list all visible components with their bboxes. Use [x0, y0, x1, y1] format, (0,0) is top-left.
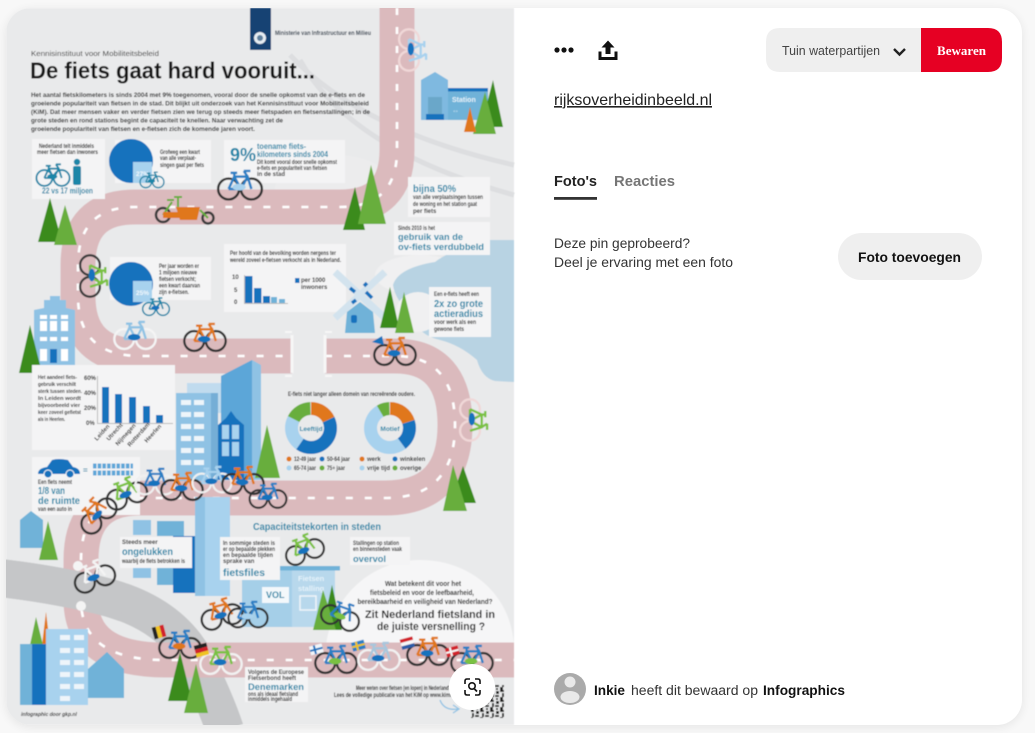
trees by windmill	[380, 287, 414, 333]
bike: top road	[399, 29, 426, 71]
fietsenstalling building: stalling	[298, 584, 325, 593]
bar chart: aandeel fietsgebruik: Utrecht	[106, 423, 125, 442]
bar chart: per 1000 inwoners	[232, 275, 328, 306]
button: foto toevoegen: Foto toevoegen	[858, 250, 961, 265]
intro paragraph: Het aantal fietskilometers is sinds 2004 met 9% toegenomen, vooral door de snelle opkomst van de e-fiets en de	[31, 93, 366, 99]
panel: ov-fiets	[394, 222, 490, 255]
panel: auto ruimte	[32, 457, 140, 515]
trees at station	[464, 80, 503, 134]
donut legends: 75+ jaar	[327, 466, 346, 472]
panel: ongelukken	[120, 537, 192, 568]
panel: kwart verplaatsingen: Grofweg een kwart	[160, 150, 200, 156]
bar chart: aandeel fietsgebruik	[84, 376, 173, 448]
saved by: heeft dit bewaard op	[631, 683, 758, 698]
bike: orange right	[374, 338, 416, 365]
panel: 9 procent: in de stad	[257, 172, 285, 178]
toolbar	[554, 28, 1002, 72]
question text	[358, 579, 495, 633]
station: ⇔	[452, 108, 459, 115]
fietsenstalling building: Fietsen	[298, 574, 325, 583]
panel: denemarken: inmiddels ingehaald	[248, 697, 292, 703]
question text: Wat betekent dit voor het	[385, 579, 462, 588]
trees top left	[38, 198, 77, 245]
bike: white wheels	[114, 322, 156, 349]
panel: actieradius: gewone fiets	[434, 327, 465, 333]
donut legends: 65-74 jaar	[294, 466, 317, 472]
tree left	[19, 325, 42, 373]
tree centre	[255, 425, 280, 478]
fietsenstalling building: VOL	[266, 590, 285, 600]
saved by	[554, 673, 845, 705]
bike: blue top	[218, 171, 262, 199]
panel: fietsen vs inwoners: meer fietsen dan inwoners	[37, 150, 99, 156]
panel: actieradius: 2x zo grote	[434, 299, 483, 310]
question text: bereikbaarheid en veiligheid van Nederland?	[358, 597, 492, 606]
panel: kwart verplaatsingen: van alle verplaat-	[160, 156, 196, 162]
panel: denemarken: Denemarken	[248, 682, 304, 692]
panel: auto ruimte: =	[83, 466, 88, 475]
panel: denemarken	[245, 667, 308, 703]
donut chart: leeftijd	[292, 408, 330, 448]
donut chart: leeftijd: Leeftijd	[299, 426, 323, 433]
button: bewaren: Bewaren	[937, 44, 986, 58]
station: Station	[452, 97, 476, 104]
panel: bar chart steden: gebruik verschilt	[38, 382, 76, 388]
saved by: Inkie	[594, 683, 625, 698]
panel: denemarken: Volgens de Europese	[248, 670, 305, 676]
panel: 9 procent: kilometers sinds 2004	[257, 150, 328, 159]
bike and flag: denmark	[451, 646, 493, 673]
panel: denemarken: ons als ideaal fietsland	[248, 692, 298, 698]
question text: Zit Nederland fietsland in	[365, 609, 495, 621]
panel: fietsen vs inwoners	[32, 139, 105, 199]
panel: 9 procent: toename fiets-	[257, 142, 306, 151]
panel: ov-fiets: gebruik van de	[398, 232, 463, 243]
icon: car	[38, 459, 80, 474]
board select	[766, 28, 921, 72]
arrow to qr code	[440, 700, 459, 713]
panel: bar chart steden: keer zoveel gefietst	[38, 410, 81, 416]
saved by: Infographics	[763, 683, 845, 698]
panel: bar chart steden: als in Heerlen.	[38, 417, 65, 423]
panel: 9 procent: 9%	[230, 145, 256, 165]
bar chart: per 1000 inwoners: 0	[234, 300, 238, 306]
panel: 25 procent e-fietsen: zijn e-fietsen.	[159, 290, 189, 296]
panel: 25 procent e-fietsen	[109, 257, 211, 315]
donut legends: winkelen	[399, 457, 426, 463]
panel: fietsfiles: en bepaalde tijden	[223, 553, 273, 559]
fietsenstalling building	[242, 566, 340, 627]
panel: fietsfiles	[220, 537, 280, 580]
station	[421, 72, 488, 120]
bicycle road	[78, 0, 514, 660]
icon: bike	[143, 298, 169, 315]
bike: stalling group	[198, 595, 245, 632]
bar chart: aandeel fietsgebruik: Nijmegen	[115, 423, 138, 447]
tabs	[554, 173, 675, 200]
donut legends: 50-64 jaar	[327, 457, 351, 463]
bicycles on the route	[70, 29, 493, 674]
bottom more info text: Meer weten over fietsen (en lopen) in Nederland?	[356, 686, 451, 692]
panel: bar chart steden: In Leiden wordt	[38, 396, 81, 402]
donut legends: 12-49 jaar	[294, 457, 317, 463]
panel: auto ruimte: Een fiets neemt	[38, 480, 72, 486]
intro paragraph: grote steden en rond stations begint de capaciteit te knellen. Naar verwachting zet de	[31, 118, 284, 124]
panel: per hoofd van de bevolking: Per hoofd van de bevolking worden nergens ter	[230, 251, 337, 257]
donut legends: overige	[400, 466, 422, 472]
source link: rijksoverheidinbeeld.nl	[554, 92, 712, 109]
bar chart: aandeel fietsgebruik: 0%	[86, 421, 95, 427]
panel: overvol: Stallingen op station	[353, 541, 399, 547]
bike: crossing	[70, 556, 118, 595]
panel: kwart verplaatsingen: singen gaat per fiets	[160, 163, 204, 169]
panel: auto ruimte: van een auto in	[38, 507, 72, 513]
donut legends: vrije tijd	[367, 466, 390, 472]
intro paragraph	[31, 93, 371, 133]
panel: 25 procent e-fietsen: 1 miljoen nieuwe	[159, 270, 198, 276]
water	[393, 240, 514, 382]
bike: left green	[80, 255, 107, 297]
logo: ministerie	[250, 8, 271, 50]
question text: de juiste versnelling ?	[377, 621, 485, 633]
panel: actieradius	[429, 287, 491, 337]
tabs: Reacties	[614, 173, 675, 190]
panel: actieradius: voor werk als een	[434, 320, 476, 326]
board select: Tuin waterpartijen	[782, 43, 880, 58]
panel: e-fietsen title: E-fiets niet langer alleen domein van recreërende oudere.	[288, 392, 415, 398]
bar chart: per 1000 inwoners: 10	[232, 275, 239, 281]
trees bottom	[168, 652, 208, 713]
qr code	[471, 685, 504, 718]
panel: 25 procent e-fietsen: een kwart daarvan	[159, 284, 200, 290]
bar chart: aandeel fietsgebruik: Leiden	[94, 424, 112, 442]
donut chart: motief: Motief	[380, 426, 400, 433]
icon: person	[73, 159, 81, 185]
trees right loop	[443, 465, 476, 511]
building left	[34, 296, 75, 365]
panel: overvol	[350, 537, 410, 565]
donut legends	[286, 456, 426, 472]
panel: 9 procent	[224, 140, 345, 183]
bar chart: per 1000 inwoners: per 1000	[301, 278, 326, 284]
panel: 9 procent: e-fiets en populariteit van fietsen	[257, 166, 327, 172]
panel: kwart verplaatsingen	[109, 139, 211, 188]
icon: bike	[140, 172, 164, 188]
intro paragraph: groeiende populariteit van fietsen en e-fietsen zich de komende jaren voort.	[31, 127, 255, 133]
panel: overvol: en binnensteden vaak	[353, 547, 403, 553]
windmill	[335, 272, 385, 333]
bar chart: per 1000 inwoners: 5	[234, 288, 238, 294]
panel: per hoofd van de bevolking: wereld zoveel e-fietsen verkocht als in Nederland.	[229, 258, 341, 264]
bike and flag: sweden	[358, 643, 400, 670]
trees at bend	[343, 165, 386, 230]
panel: bar chart steden	[32, 365, 175, 450]
prompt text	[554, 236, 733, 270]
panel: fietsfiles: In sommige steden is	[223, 541, 276, 547]
house and tree left	[20, 511, 58, 560]
ministry name: Ministerie van Infrastructuur en Milieu	[275, 30, 371, 37]
panel: auto ruimte: 1/8 van	[38, 486, 65, 497]
bottom circle background	[327, 560, 514, 642]
panel: ov-fiets: ov-fiets verdubbeld	[398, 242, 484, 253]
tabs: Foto's	[554, 173, 597, 190]
panel: ov-fiets: Sinds 2010 is het	[398, 226, 435, 232]
icon: avatar	[554, 673, 586, 705]
panel: bar chart steden: sterk tussen steden.	[38, 389, 82, 395]
bike group: traffic jam	[72, 489, 121, 538]
icon: bike	[36, 164, 70, 186]
panel: 25 procent e-fietsen: fietsen verkocht;	[159, 277, 196, 283]
bike: cargo	[156, 197, 214, 224]
bike: green right	[460, 399, 487, 441]
credit: infographic door gkp.nl	[21, 712, 77, 718]
title: De fiets gaat hard vooruit...	[30, 58, 315, 84]
panel: bar chart steden: Het aandeel fiets-	[38, 375, 77, 381]
bar chart: aandeel fietsgebruik: 40%	[84, 391, 97, 397]
panel: 25 procent e-fietsen: 25%	[136, 290, 149, 297]
bike and flag: finland	[315, 646, 357, 673]
bar chart: aandeel fietsgebruik: Heerlen	[144, 424, 163, 444]
panel: 9 procent: Dit komt vooral door snelle opkomst	[257, 160, 337, 166]
panel: 25 procent e-fietsen: Per jaar worden er	[159, 264, 200, 270]
button: visual search	[449, 664, 495, 710]
icon: share	[598, 40, 618, 60]
bike and flag: belgium	[159, 631, 201, 658]
highway	[119, 584, 243, 725]
prompt text: Deze pin geprobeerd?	[554, 236, 690, 251]
bar chart: aandeel fietsgebruik: 60%	[84, 376, 97, 382]
prompt text: Deel je ervaring met een foto	[554, 255, 733, 270]
bike and flag: germany	[200, 647, 242, 674]
city centre buildings	[176, 360, 261, 481]
panel: actieradius: Een e-fiets heeft een	[434, 292, 479, 298]
panel: per hoofd van de bevolking	[224, 244, 346, 312]
crossing markers	[73, 561, 86, 611]
trees at stalling	[313, 585, 342, 630]
panel: ongelukken: ongelukken	[122, 547, 173, 558]
bar chart: per 1000 inwoners: inwoners	[301, 285, 328, 291]
panel: bijna 50%: bijna 50%	[413, 183, 457, 195]
button: foto toevoegen	[838, 233, 982, 280]
intro paragraph: groeiende populariteit van fietsen in de stad. Dit blijkt uit onderzoek van het Kennisinstituut voor Mobiliteitsbeleid	[31, 102, 369, 108]
bottom more info text: Lees de volledige publicatie van het KiM op www.kimnet.nl	[334, 693, 462, 699]
panel: overvol: overvol	[353, 554, 386, 565]
panel: fietsfiles: sprake van	[223, 559, 255, 565]
lower city buildings	[133, 497, 230, 596]
panel: bar chart steden: bijvoorbeeld vier	[38, 403, 80, 409]
panel: fietsfiles: er op bepaalde plekken	[223, 547, 275, 553]
panel: bijna 50%: de woning en het station gaat	[413, 202, 477, 208]
panel: fietsen vs inwoners: 22 vs 17 miljoen	[42, 186, 93, 196]
donut chart: motief	[370, 408, 410, 448]
bike: orange	[184, 324, 226, 351]
question text: fietsbeleid en voor de leefbaarheid,	[370, 588, 474, 597]
panel: fietsen vs inwoners: Nederland telt inmiddels	[39, 144, 95, 150]
white cloud in water	[399, 292, 430, 332]
panel: bijna 50%: van alle verplaatsingen tussen	[413, 195, 483, 201]
panel: ongelukken: waarbij de fiets betrokken is	[121, 559, 186, 565]
intro paragraph: (KiM). Dat meer mensen vaker en verder fietsen zien we terug op steeds meer fietspaden en fietsenstallingen; in de	[31, 110, 371, 116]
panel: ongelukken: Steeds meer	[122, 540, 158, 546]
plug icon	[372, 336, 384, 345]
bottom more info text	[334, 686, 462, 699]
panel: denemarken: Fietserbond heeft	[248, 676, 296, 682]
icon: more dots	[554, 47, 574, 53]
button: bewaren	[921, 28, 1002, 72]
bottom left city	[20, 612, 124, 705]
panel: actieradius: actieradius	[434, 309, 483, 320]
bar chart: aandeel fietsgebruik: 20%	[84, 406, 97, 412]
donut legends: werk	[366, 457, 381, 463]
panel: fietsfiles: fietsfiles	[223, 568, 265, 579]
background clouds and rail tracks	[289, 54, 514, 197]
bike and flag: netherlands	[407, 638, 449, 665]
infographic image	[0, 0, 514, 730]
icon: small bikes	[93, 466, 133, 473]
heading: capaciteitstekorten: Capaciteitstekorten in steden	[253, 522, 381, 533]
bar chart: aandeel fietsgebruik: Rotterdam	[127, 422, 152, 448]
panel: bijna 50%: per fiets	[413, 209, 437, 215]
panel: kwart verplaatsingen: 27%	[136, 171, 149, 178]
subtitle: Kennisinstituut voor Mobiliteitsbeleid	[31, 49, 159, 58]
panel: auto ruimte: de ruimte	[38, 496, 80, 507]
panel: bijna 50%	[408, 177, 490, 217]
highway over road	[64, 568, 100, 615]
